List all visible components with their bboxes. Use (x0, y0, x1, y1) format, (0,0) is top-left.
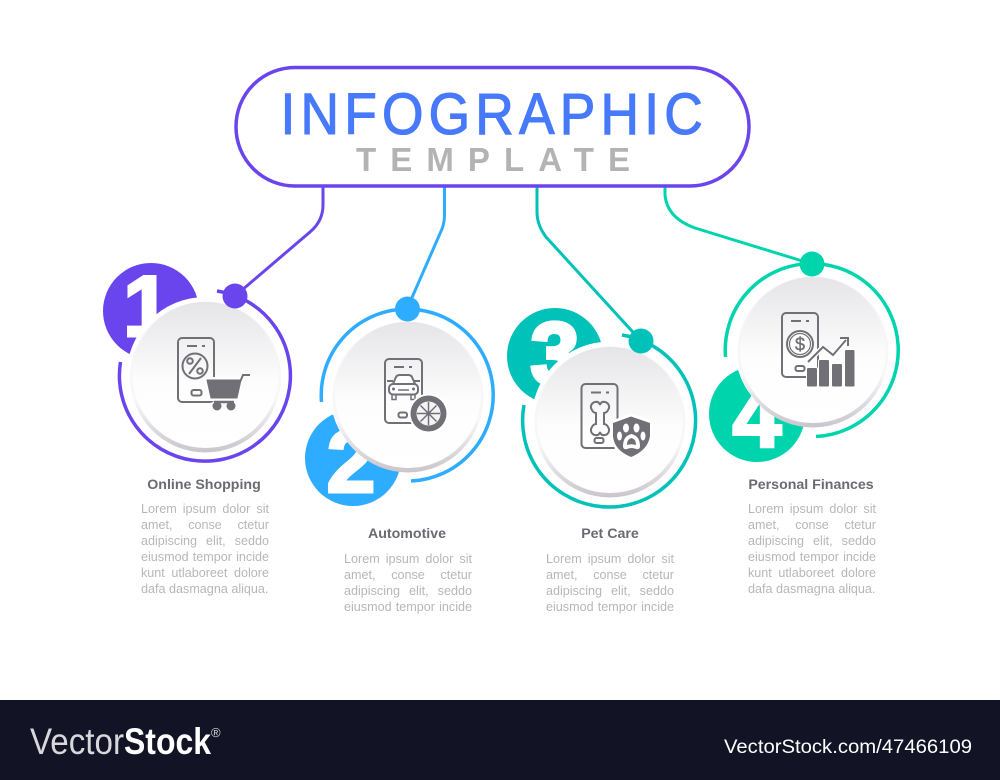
text block: online shopping: adipiscing elit, seddo (141, 534, 269, 548)
heading: online shopping: Online Shopping (147, 477, 261, 493)
ring 2 (321, 309, 493, 481)
text block: pet care: Lorem ipsum dolor sit (546, 552, 674, 566)
text block: automotive (344, 552, 472, 614)
text block: online shopping: amet, conse ctetur (141, 518, 269, 532)
text block: personal finances: adipiscing elit, seddo (748, 534, 876, 548)
disc 2 (330, 315, 486, 472)
panel: step 3 graphic (507, 304, 696, 507)
number badge 3: 3 (531, 304, 579, 403)
disc 3 (532, 342, 688, 498)
text block: personal finances (748, 502, 876, 596)
node 1 (222, 284, 248, 308)
panel: step 2 graphic (305, 296, 493, 511)
number badge 4 (709, 366, 805, 466)
disc 1 (126, 297, 284, 455)
icon: phone with dollar and growth bars (782, 313, 855, 387)
text block: online shopping (141, 502, 269, 596)
number badge 3 (507, 304, 603, 404)
text block: personal finances: eiusmod tempor incide (748, 550, 876, 564)
connector: purple line (235, 186, 323, 296)
title: INFOGRAPHIC (280, 82, 703, 146)
heading: automotive: Automotive (368, 526, 446, 542)
text block: automotive: Lorem ipsum dolor sit (344, 552, 472, 566)
connector: blue line (407, 186, 444, 309)
connector: teal line (537, 186, 641, 341)
footer bar (0, 700, 1000, 780)
node 2 (395, 296, 420, 322)
number badge 1 (103, 259, 199, 359)
icon: phone with percent and cart (178, 338, 250, 410)
text block: pet care (546, 552, 674, 614)
text block: personal finances: kunt utlaboreet dolore (748, 566, 876, 580)
node 4 (800, 252, 824, 276)
ring 3 (523, 335, 696, 507)
number badge 2 (305, 410, 401, 511)
heading: personal finances: Personal Finances (748, 477, 874, 493)
disc 4 (735, 270, 891, 428)
icon: phone with car and tire (385, 359, 448, 434)
subtitle: TEMPLATE (356, 141, 630, 178)
connector: green line (665, 186, 812, 264)
text block: online shopping: eiusmod tempor incide (141, 550, 269, 564)
footer logo: Vector (30, 721, 124, 762)
ring 4 (725, 264, 898, 436)
footer logo (30, 721, 221, 762)
footer logo: Stock (124, 721, 211, 762)
text block: pet care: adipiscing elit, seddo (546, 584, 674, 598)
text block: personal finances: amet, conse ctetur (748, 518, 876, 532)
text block: personal finances: Lorem ipsum dolor sit (748, 502, 876, 516)
number badge 2: 2 (327, 412, 375, 511)
number badge 1: 1 (123, 259, 171, 355)
panel: step 1 graphic (103, 259, 290, 461)
text block: online shopping: dafa dasmagna aliqua. (141, 582, 268, 596)
text block: pet care: amet, conse ctetur (546, 568, 674, 582)
footer logo: ® (211, 725, 221, 740)
title pill (236, 68, 749, 186)
footer id: VectorStock.com/47466109 (724, 737, 972, 758)
text block: pet care: eiusmod tempor incide (546, 600, 674, 614)
number badge 4: 4 (733, 367, 782, 466)
ring 1 (119, 291, 290, 461)
text block: online shopping: kunt utlaboreet dolore (141, 566, 269, 580)
text block: automotive: eiusmod tempor incide (344, 600, 472, 614)
text block: online shopping: Lorem ipsum dolor sit (141, 502, 269, 516)
text block: automotive: amet, conse ctetur (344, 568, 472, 582)
icon: phone with bone and paw shield (582, 384, 650, 457)
text block: personal finances: dafa dasmagna aliqua. (748, 582, 875, 596)
heading: pet care: Pet Care (581, 526, 639, 542)
icon: phone with dollar and growth bars: $ (795, 334, 805, 354)
panel: step 4 graphic (709, 252, 898, 466)
node 3 (628, 328, 654, 354)
text block: automotive: adipiscing elit, seddo (344, 584, 472, 598)
